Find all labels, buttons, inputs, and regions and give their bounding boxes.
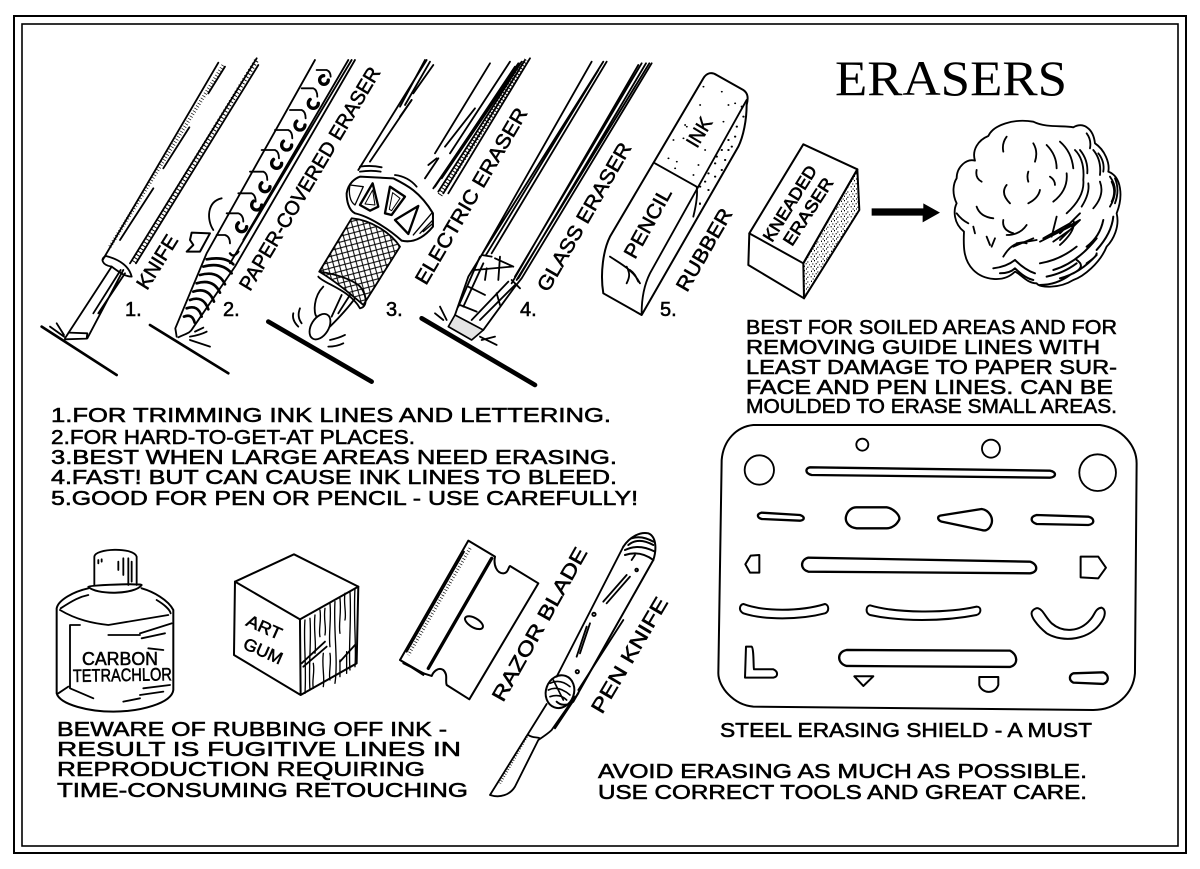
label: number 1: 1. [125, 299, 142, 321]
warning text: RESULT IS FUGITIVE LINES IN [57, 739, 461, 761]
kneaded eraser block [748, 144, 859, 298]
kneaded eraser blob [953, 121, 1120, 287]
label: eraser: ERASER [779, 174, 837, 249]
warning text: BEWARE OF RUBBING OFF INK - [57, 719, 447, 741]
label: pen knife: PEN KNIFE [587, 594, 673, 718]
label: knife: KNIFE [133, 231, 183, 294]
label: razor blade: RAZOR BLADE [488, 544, 592, 705]
warning text [57, 719, 468, 802]
kneaded eraser description [746, 317, 1117, 418]
closing advice: AVOID ERASING AS MUCH AS POSSIBLE. [598, 761, 1087, 783]
tool 4: glass eraser [422, 62, 652, 385]
title: ERASERS [835, 50, 1067, 106]
label: glass eraser: GLASS ERASER [533, 139, 636, 296]
kneaded eraser description: MOULDED TO ERASE SMALL AREAS. [746, 396, 1117, 418]
label: ink: INK [682, 113, 718, 152]
numbered uses list: 3.BEST WHEN LARGE AREAS NEED ERASING. [51, 447, 617, 469]
label: gum: GUM [240, 634, 286, 668]
label: number 2: 2. [223, 299, 240, 321]
label: rubber: RUBBER [672, 205, 737, 296]
pen knife [490, 533, 673, 796]
arrow [872, 203, 940, 222]
kneaded eraser description: REMOVING GUIDE LINES WITH [746, 337, 1100, 359]
tool 5: rubber eraser [602, 73, 748, 321]
numbered uses list: 2.FOR HARD-TO-GET-AT PLACES. [51, 427, 415, 449]
numbered uses list: 4.FAST! BUT CAN CAUSE INK LINES TO BLEED. [51, 467, 617, 489]
label: carbon: CARBON [82, 649, 158, 669]
kneaded eraser description: FACE AND PEN LINES. CAN BE [746, 377, 1113, 399]
kneaded eraser description: BEST FOR SOILED AREAS AND FOR [746, 317, 1117, 339]
tool 2: paper-covered eraser [150, 60, 385, 373]
label: electric eraser: ELECTRIC ERASER [411, 104, 532, 289]
numbered uses list: 1.FOR TRIMMING INK LINES AND LETTERING. [51, 405, 611, 427]
tool 1: knife [42, 58, 258, 375]
label: paper-covered eraser: PAPER-COVERED ERASER [235, 63, 385, 295]
label: pencil: PENCIL [620, 184, 677, 262]
closing advice: USE CORRECT TOOLS AND GREAT CARE. [598, 782, 1087, 804]
tool 3: electric eraser [268, 58, 532, 382]
label: tetrachlor: TETRACHLOR [73, 664, 172, 686]
bottle: carbon tetrachloride [57, 550, 173, 712]
label: number 5: 5. [660, 299, 677, 321]
cube: art gum [234, 554, 358, 695]
label: number 3: 3. [386, 299, 403, 321]
closing advice [598, 761, 1087, 804]
shield caption: STEEL ERASING SHIELD - A MUST [720, 720, 1092, 742]
numbered uses list: 5.GOOD FOR PEN OR PENCIL - USE CAREFULLY! [51, 488, 638, 510]
razor blade [400, 541, 592, 705]
label: number 4: 4. [520, 299, 537, 321]
label: art: ART [243, 611, 285, 644]
label: kneaded: KNEADED [759, 162, 821, 245]
steel erasing shield [718, 425, 1137, 710]
warning text: REPRODUCTION REQUIRING [57, 759, 425, 781]
warning text: TIME-CONSUMING RETOUCHING [57, 780, 468, 802]
numbered uses list [51, 405, 638, 510]
kneaded eraser description: LEAST DAMAGE TO PAPER SUR- [746, 357, 1117, 379]
